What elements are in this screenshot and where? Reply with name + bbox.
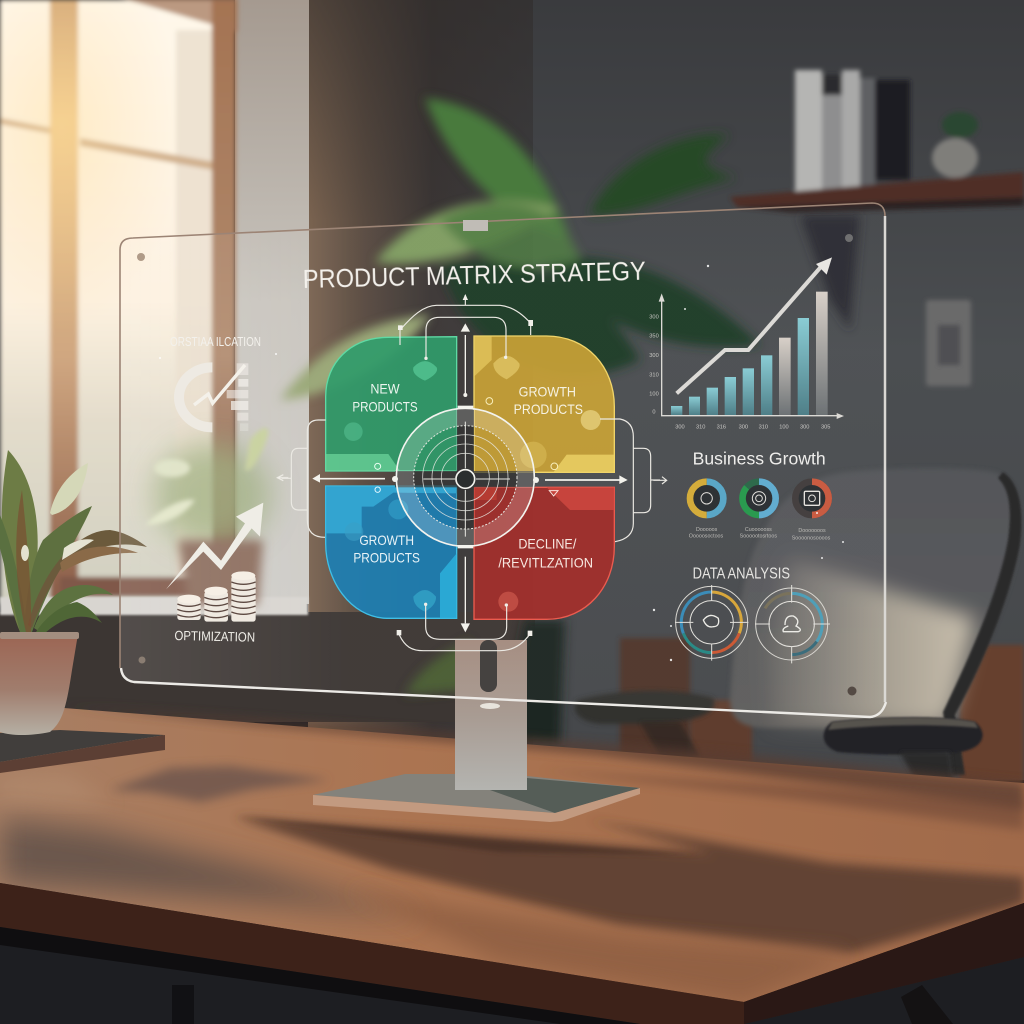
- coin stacks: [177, 571, 256, 622]
- gauge arc: [179, 367, 212, 427]
- axis labels: 300: [649, 314, 659, 320]
- axis labels: 350: [649, 334, 659, 340]
- quadrant: growth products (yellow): PRODUCTS: [514, 401, 583, 417]
- quadrant: growth products (blue): [326, 486, 457, 618]
- left section: optimization rising arrow and coins: OPTIMIZATION: [174, 628, 255, 645]
- axis labels: 100: [779, 425, 789, 431]
- quadrant: growth products (yellow): GROWTH: [519, 384, 576, 400]
- donut captions: Dooooooos: [798, 528, 826, 534]
- axis labels: 300: [739, 425, 748, 431]
- axis labels: 310: [759, 425, 768, 431]
- big arrow: [166, 503, 263, 589]
- quadrant: decline / revitalization (red): DECLINE/: [518, 536, 576, 552]
- left section: optimization dial: ORSTIAA ILCATION: [170, 334, 261, 349]
- blurred plant seen through panel: [145, 428, 270, 605]
- donut icon 3: [795, 482, 829, 515]
- radial gauge 1: [675, 585, 748, 661]
- quadrant: decline / revitalization (red): [474, 487, 614, 619]
- section: business growth: Business Growth: [693, 448, 826, 468]
- donut captions: Dooooos: [696, 527, 718, 533]
- donut icon 1: [690, 482, 723, 515]
- left section: optimization rising arrow and coins: [166, 475, 288, 645]
- background shelf with binders and plant: [730, 70, 1024, 386]
- donut captions: Cuoooooss: [745, 527, 772, 533]
- growth bar chart: [649, 257, 844, 431]
- wooden desk: [0, 703, 1024, 1024]
- decorative sparkle dots: [159, 265, 844, 661]
- stepped bars: [227, 363, 248, 431]
- axis labels: 300: [675, 425, 685, 431]
- potted plant at left: [0, 450, 147, 735]
- axis labels: 310: [696, 425, 705, 431]
- product matrix diagram: [282, 294, 660, 651]
- connector lines: [282, 295, 660, 651]
- directional arrows: [312, 323, 628, 632]
- notebook on desk: [0, 730, 165, 773]
- window with bright panes: [0, 0, 308, 615]
- monitor stand: [313, 640, 640, 822]
- quadrant: decline / revitalization (red): /REVITLZATION: [498, 554, 593, 570]
- title: PRODUCT MATRIX STRATEGY: [302, 258, 646, 294]
- axis labels: 300: [649, 353, 659, 359]
- glass panel: [120, 203, 886, 717]
- quadrant: growth products (blue): GROWTH: [359, 532, 414, 548]
- center target dial: [395, 406, 535, 548]
- donut captions: Ooooosoctoos: [689, 534, 724, 540]
- axis labels: 310: [649, 372, 659, 378]
- radial gauge 2: [755, 585, 830, 663]
- background cabinet and office chair: [575, 468, 1024, 783]
- donut icon 2: [742, 482, 776, 515]
- donut captions: Soooonosoooos: [792, 535, 831, 541]
- axis labels: 0: [652, 410, 656, 416]
- left section: optimization dial: [170, 334, 261, 431]
- donut captions: Soooootosrtoos: [740, 534, 777, 540]
- quadrant: new products (green): NEW: [370, 380, 400, 396]
- check trend line: [194, 365, 245, 405]
- axis labels: 316: [717, 425, 726, 431]
- donut captions: [689, 527, 831, 541]
- quadrant: growth products (blue): PRODUCTS: [353, 550, 420, 566]
- section: data analysis: [675, 565, 830, 663]
- quadrant: growth products (yellow): [474, 336, 614, 472]
- rising trend arrow: [677, 257, 832, 393]
- desk lighting and shadows: [0, 705, 1024, 1002]
- background plant behind panel: [280, 98, 760, 745]
- quadrant: new products (green): [326, 337, 457, 471]
- quadrant: new products (green): PRODUCTS: [352, 398, 418, 414]
- axis labels: 305: [821, 425, 830, 431]
- bars: [671, 292, 828, 415]
- axes: [662, 300, 838, 416]
- axis labels: 300: [800, 425, 809, 431]
- axis labels: [649, 314, 830, 431]
- section: business growth: [653, 448, 831, 541]
- axis labels: 100: [649, 392, 659, 398]
- section: data analysis: DATA ANALYSIS: [693, 565, 790, 582]
